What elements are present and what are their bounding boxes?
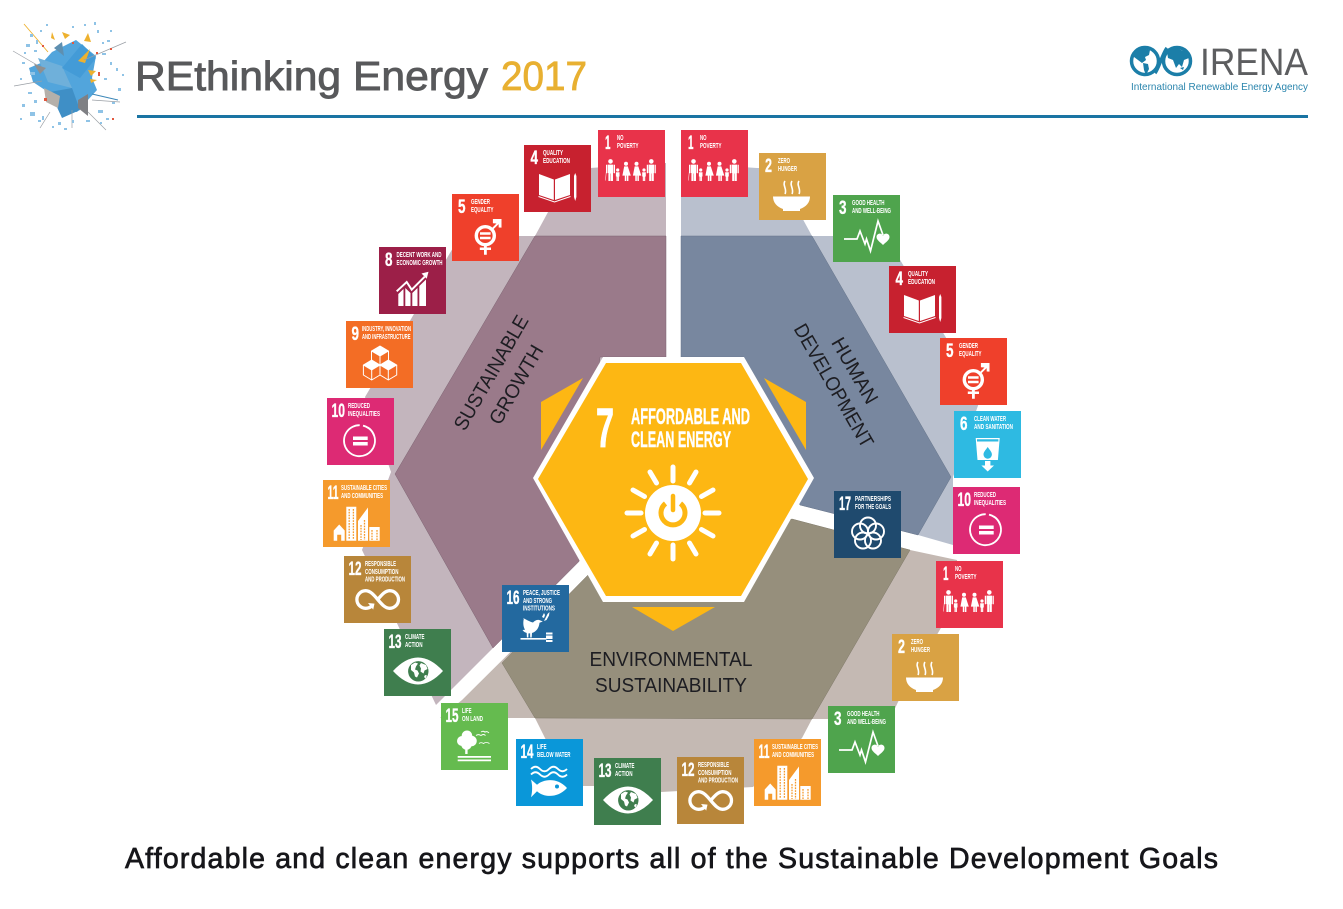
tile: SDG 1 left: POVERTY <box>617 141 639 150</box>
tile: SDG 3 upper: AND WELL-BEING <box>852 206 891 215</box>
tile: SDG 8: DECENT WORK AND <box>396 250 442 259</box>
caption: Affordable and clean energy supports all of the Sustainable Development Goals <box>125 843 1218 875</box>
tile: SDG 5 left <box>452 194 519 261</box>
tile: SDG 1 right <box>681 130 748 197</box>
tile: SDG 5 right: GENDER <box>959 341 978 350</box>
tile: SDG 16: AND STRONG <box>523 596 552 605</box>
tile: SDG 10 left: REDUCED <box>348 401 370 410</box>
central hexagon: SDG 7: 7 <box>596 396 614 459</box>
tile: SDG 15: 15 <box>446 705 459 727</box>
tile: SDG 11 left: AND COMMUNITIES <box>341 491 383 500</box>
tile: SDG 13 bottom <box>594 758 661 825</box>
panel: environmental sustainability <box>502 519 910 719</box>
tile: SDG 14: 14 <box>520 741 534 763</box>
tile: SDG 1 lower: POVERTY <box>955 572 977 581</box>
tile: SDG 8: ECONOMIC GROWTH <box>396 258 442 267</box>
tile: SDG 4 left <box>524 145 591 212</box>
tile: SDG 4 left: EDUCATION <box>543 156 570 165</box>
tile: SDG 3 lower: 3 <box>834 708 842 730</box>
tile: SDG 10 right <box>953 487 1020 554</box>
tile: SDG 10 right: 10 <box>958 489 971 511</box>
tile: SDG 3 upper: 3 <box>839 197 847 219</box>
tile: SDG 2 lower: HUNGER <box>911 645 930 654</box>
tile: SDG 11 left: 11 <box>328 482 339 504</box>
tile: SDG 12 left: CONSUMPTION <box>365 567 398 576</box>
tile: SDG 5 left: EQUALITY <box>471 205 494 214</box>
tile: SDG 2 upper: HUNGER <box>778 164 797 173</box>
tile: SDG 12 bottom: AND PRODUCTION <box>698 776 738 784</box>
tile: SDG 10 left: 10 <box>332 400 345 422</box>
panel: sustainable growth <box>395 236 666 648</box>
title year: 2017 <box>501 53 587 99</box>
tile: SDG 12 left: AND PRODUCTION <box>365 574 405 584</box>
tile: SDG 2 lower: ZERO <box>911 637 923 646</box>
arrow: toward human development <box>764 378 806 450</box>
tile: SDG 2 upper: ZERO <box>778 156 790 165</box>
tile: SDG 16 <box>502 585 569 652</box>
tile: SDG 1 lower <box>936 561 1003 628</box>
tile: SDG 12 bottom: 12 <box>682 759 695 781</box>
panel: environmental sustainability background <box>440 550 960 792</box>
tile: SDG 1 lower: NO <box>955 564 962 573</box>
arrow: toward sustainable growth <box>541 378 583 450</box>
tile: SDG 13 bottom: ACTION <box>615 769 632 778</box>
tile: SDG 4 right: EDUCATION <box>908 277 935 286</box>
label: environmental sustainability: SUSTAINABILITY <box>595 675 747 697</box>
tile: SDG 4 right: 4 <box>896 268 903 290</box>
tile: SDG 10 left: INEQUALITIES <box>348 409 380 418</box>
central hexagon: SDG 7: CLEAN ENERGY <box>631 427 731 452</box>
tile: SDG 13 bottom: CLIMATE <box>615 761 635 770</box>
tile: SDG 13 left: CLIMATE <box>405 632 425 641</box>
tile: SDG 8: 8 <box>385 249 393 271</box>
tile: SDG 5 right: EQUALITY <box>959 349 982 358</box>
tile: SDG 5 right <box>940 338 1007 405</box>
tile: SDG 2 upper <box>759 153 826 220</box>
tile: SDG 16: 16 <box>506 587 520 609</box>
tile: SDG 17: PARTNERSHIPS <box>855 494 891 503</box>
tile: SDG 1 right: 1 <box>688 132 694 154</box>
IRENA logo <box>1131 42 1309 93</box>
tile: SDG 5 left: 5 <box>458 196 466 218</box>
tile: SDG 10 right: REDUCED <box>974 490 996 499</box>
header: burst graphic <box>13 22 126 130</box>
tile: SDG 11 left: SUSTAINABLE CITIES <box>341 483 387 492</box>
tile: SDG 13 left <box>384 629 451 696</box>
label: environmental sustainability <box>590 649 752 697</box>
tile: SDG 1 left: NO <box>617 133 624 142</box>
IRENA logo: IRENA <box>1200 42 1309 84</box>
tile: SDG 14: BELOW WATER <box>537 750 571 759</box>
arrow: toward environmental sustainability <box>632 607 715 631</box>
panel: human development <box>681 236 951 535</box>
label: environmental sustainability: ENVIRONMENTAL <box>590 649 752 671</box>
tile: SDG 3 lower: AND WELL-BEING <box>847 717 886 726</box>
tile: SDG 11 bottom <box>754 739 821 806</box>
tile: SDG 13 left: 13 <box>388 631 402 653</box>
tile: SDG 11 bottom: 11 <box>758 741 770 763</box>
tile: SDG 15: LIFE <box>462 706 472 715</box>
label: sustainable growth: GROWTH <box>485 341 548 429</box>
label: sustainable growth: SUSTAINABLE <box>450 312 534 434</box>
tile: SDG 1 right: POVERTY <box>700 141 722 150</box>
title: REthinking Energy <box>135 53 489 99</box>
tile: SDG 12 bottom <box>677 757 744 824</box>
tile: SDG 12 left <box>344 556 411 623</box>
label: human development: DEVELOPMENT <box>789 320 877 452</box>
tile: SDG 1 lower: 1 <box>943 563 949 585</box>
central hexagon: SDG 7: AFFORDABLE AND <box>631 404 750 429</box>
tile: SDG 13 bottom: 13 <box>598 760 612 782</box>
tile: SDG 12 bottom: CONSUMPTION <box>698 768 732 777</box>
label: human development: HUMAN <box>826 334 882 408</box>
panel: human development background <box>681 163 981 545</box>
tile: SDG 11 bottom: AND COMMUNITIES <box>772 750 814 759</box>
tile: SDG 6: AND SANITATION <box>974 422 1013 431</box>
tile: SDG 10 right: INEQUALITIES <box>974 498 1006 507</box>
tile: SDG 11 left <box>323 480 390 547</box>
tile: SDG 9: 9 <box>352 323 359 345</box>
tile: SDG 2 upper: 2 <box>765 155 772 177</box>
tile: SDG 1 left: 1 <box>605 132 611 154</box>
tile: SDG 9: INDUSTRY, INNOVATION <box>362 324 411 333</box>
tile: SDG 16: INSTITUTIONS <box>523 604 555 612</box>
tile: SDG 4 left: QUALITY <box>543 148 563 157</box>
tile: SDG 6 <box>954 411 1021 478</box>
tile: SDG 1 left <box>598 130 665 197</box>
tile: SDG 16: PEACE, JUSTICE <box>523 588 560 597</box>
tile: SDG 15 <box>441 703 508 770</box>
tile: SDG 1 right: NO <box>700 133 707 142</box>
tile: SDG 5 left: GENDER <box>471 197 490 206</box>
panel: sustainable growth background <box>362 163 666 705</box>
tile: SDG 3 upper: GOOD HEALTH <box>852 198 884 207</box>
tile: SDG 6: CLEAN WATER <box>974 414 1006 423</box>
tile: SDG 2 lower <box>892 634 959 701</box>
tile: SDG 17 <box>834 491 901 558</box>
tile: SDG 12 left: RESPONSIBLE <box>365 559 396 568</box>
tile: SDG 17: FOR THE GOALS <box>855 502 891 511</box>
tile: SDG 8 <box>379 247 446 314</box>
central hexagon: SDG 7 <box>533 357 814 602</box>
tile: SDG 3 upper <box>833 195 900 262</box>
tile: SDG 13 left: ACTION <box>405 640 422 649</box>
tile: SDG 11 bottom: SUSTAINABLE CITIES <box>772 742 818 751</box>
tile: SDG 14: LIFE <box>537 742 547 751</box>
IRENA logo: International Renewable Energy Agency <box>1131 81 1309 93</box>
tile: SDG 3 lower: GOOD HEALTH <box>847 709 880 718</box>
tile: SDG 12 left: 12 <box>348 558 362 580</box>
tile: SDG 5 right: 5 <box>946 340 954 362</box>
header rule <box>137 115 1308 118</box>
tile: SDG 4 right: QUALITY <box>908 269 928 278</box>
tile: SDG 14 <box>516 739 583 806</box>
tile: SDG 9 <box>346 321 413 388</box>
tile: SDG 4 right <box>889 266 956 333</box>
tile: SDG 9: AND INFRASTRUCTURE <box>362 332 411 341</box>
tile: SDG 17: 17 <box>839 493 851 515</box>
tile: SDG 6: 6 <box>960 413 968 435</box>
tile: SDG 10 left <box>327 398 394 465</box>
tile: SDG 2 lower: 2 <box>898 636 905 658</box>
tile: SDG 12 bottom: RESPONSIBLE <box>698 760 729 769</box>
tile: SDG 4 left: 4 <box>530 147 538 169</box>
tile: SDG 3 lower <box>828 706 895 773</box>
tile: SDG 15: ON LAND <box>462 714 483 723</box>
